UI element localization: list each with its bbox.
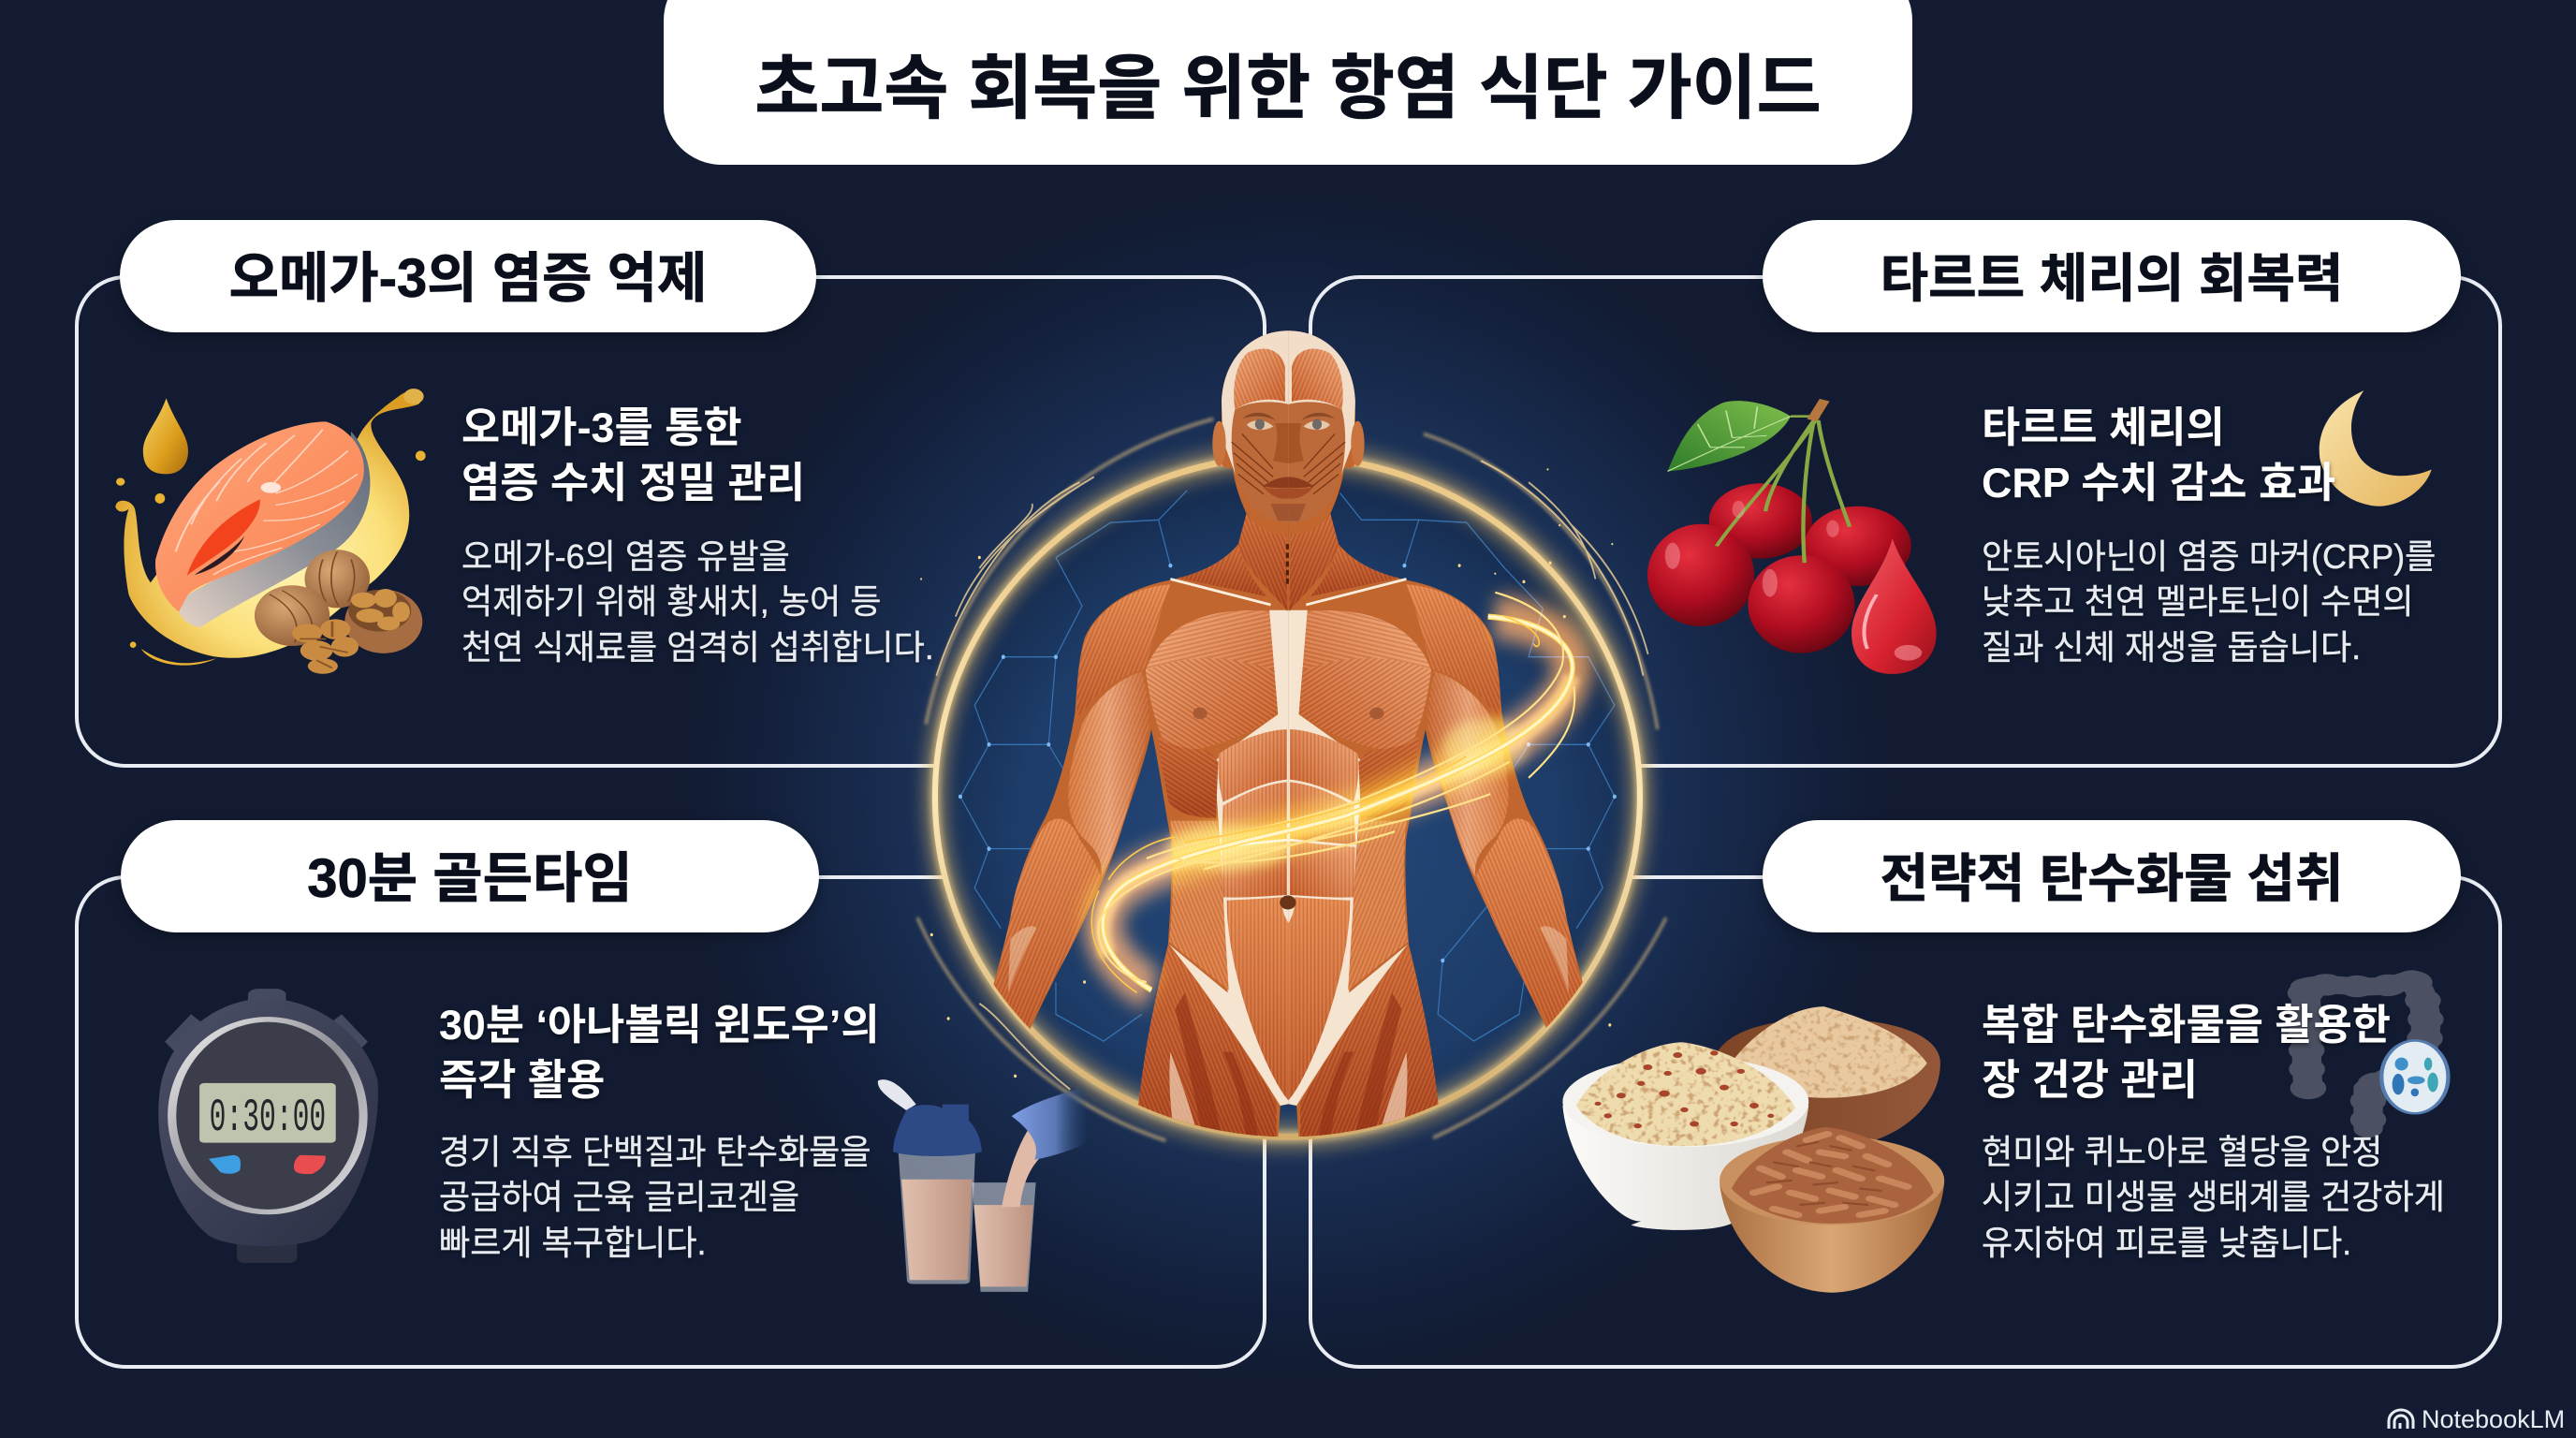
body text: carbohydrates: [1982, 1133, 2445, 1262]
icon: protein shaker and glass: [878, 1079, 1086, 1292]
body text: golden time: [439, 1133, 871, 1262]
body: clipped muscular torso: [991, 330, 1586, 1142]
body text: golden time: 경기 직후 단백질과 탄수화물을: [439, 1133, 871, 1171]
subheading: omega-3: [461, 404, 805, 506]
icon: grain bowls: [1562, 1006, 1945, 1293]
heading: golden time pill: [121, 820, 819, 932]
icon: crescent moon: [2320, 390, 2432, 506]
subheading: omega-3: 염증 수치 정밀 관리: [461, 459, 805, 506]
heading: tart cherry pill: [1763, 220, 2461, 332]
panel: tart cherry: [1309, 220, 2502, 768]
body text: carbohydrates: 시키고 미생물 생태계를 건강하게: [1982, 1178, 2445, 1216]
subheading: carbohydrates: 복합 탄수화물을 활용한: [1982, 1002, 2391, 1049]
body text: omega-3: 억제하기 위해 황새치, 농어 등: [461, 582, 881, 621]
sternum and navel: [1280, 896, 1296, 909]
heading: carbohydrates pill: 전략적 탄수화물 섭취: [1881, 849, 2343, 908]
subheading: carbohydrates: 장 건강 관리: [1982, 1056, 2198, 1103]
body text: omega-3: 천연 식재료를 엄격히 섭취합니다.: [461, 628, 934, 667]
subheading: carbohydrates: [1982, 1002, 2391, 1103]
NotebookLM watermark: NotebookLM: [2422, 1405, 2565, 1433]
subheading: omega-3: 오메가-3를 통한: [461, 404, 742, 451]
body text: tart cherry: [1982, 537, 2436, 667]
panel: strategic carbohydrates: [1309, 820, 2502, 1369]
body text: tart cherry: 질과 신체 재생을 돕습니다.: [1982, 628, 2361, 667]
body text: omega-3: 오메가-6의 염증 유발을: [461, 537, 790, 576]
heading: carbohydrates pill: [1763, 820, 2461, 932]
sparkles: [920, 468, 1613, 1078]
subheading: golden time: 30분 ‘아나볼릭 윈도우’의: [439, 1002, 880, 1049]
heading: omega-3 pill: [120, 220, 816, 332]
body text: omega-3: [461, 537, 934, 667]
subheading: tart cherry: 타르트 체리의: [1982, 404, 2225, 451]
heading: golden time pill: 30분 골든타임: [307, 848, 633, 909]
subheading: tart cherry: CRP 수치 감소 효과: [1982, 459, 2335, 506]
heading: tart cherry pill: 타르트 체리의 회복력: [1881, 249, 2343, 308]
panel: omega-3: [75, 220, 1266, 768]
icon: cherries and red drop: [1647, 399, 1937, 674]
body text: golden time: 공급하여 근육 글리코겐을: [439, 1178, 799, 1216]
glowing energy ring: [917, 418, 1666, 1140]
body text: tart cherry: 안토시아닌이 염증 마커(CRP)를: [1982, 537, 2436, 576]
body text: golden time: 빠르게 복구합니다.: [439, 1224, 707, 1262]
title banner: 초고속 회복을 위한 항염 식단 가이드: [754, 49, 1822, 127]
icon: intestine with microbiome: [2288, 970, 2451, 1137]
icon: stopwatch: 0:30:00: [210, 1093, 326, 1145]
body text: tart cherry: 낮추고 천연 멜라토닌이 수면의: [1982, 582, 2414, 621]
subheading: golden time: [439, 1002, 880, 1103]
icon: stopwatch: [158, 989, 378, 1263]
title banner: [664, 0, 1912, 165]
golden energy swirl: [1103, 617, 1573, 990]
ring interior with hexagon grid: [935, 457, 1640, 1137]
icon: salmon, oil and walnuts: [115, 389, 426, 674]
central figure: muscular body inside glowing ring: [914, 330, 1669, 1161]
heading: omega-3 pill: 오메가-3의 염증 억제: [229, 248, 707, 309]
panel: 30 minute golden time: [75, 820, 1266, 1369]
body text: carbohydrates: 유지하여 피로를 낮춥니다.: [1982, 1224, 2351, 1262]
subheading: golden time: 즉각 활용: [439, 1056, 605, 1103]
body text: carbohydrates: 현미와 퀴노아로 혈당을 안정: [1982, 1133, 2382, 1171]
subheading: tart cherry: [1982, 404, 2338, 506]
